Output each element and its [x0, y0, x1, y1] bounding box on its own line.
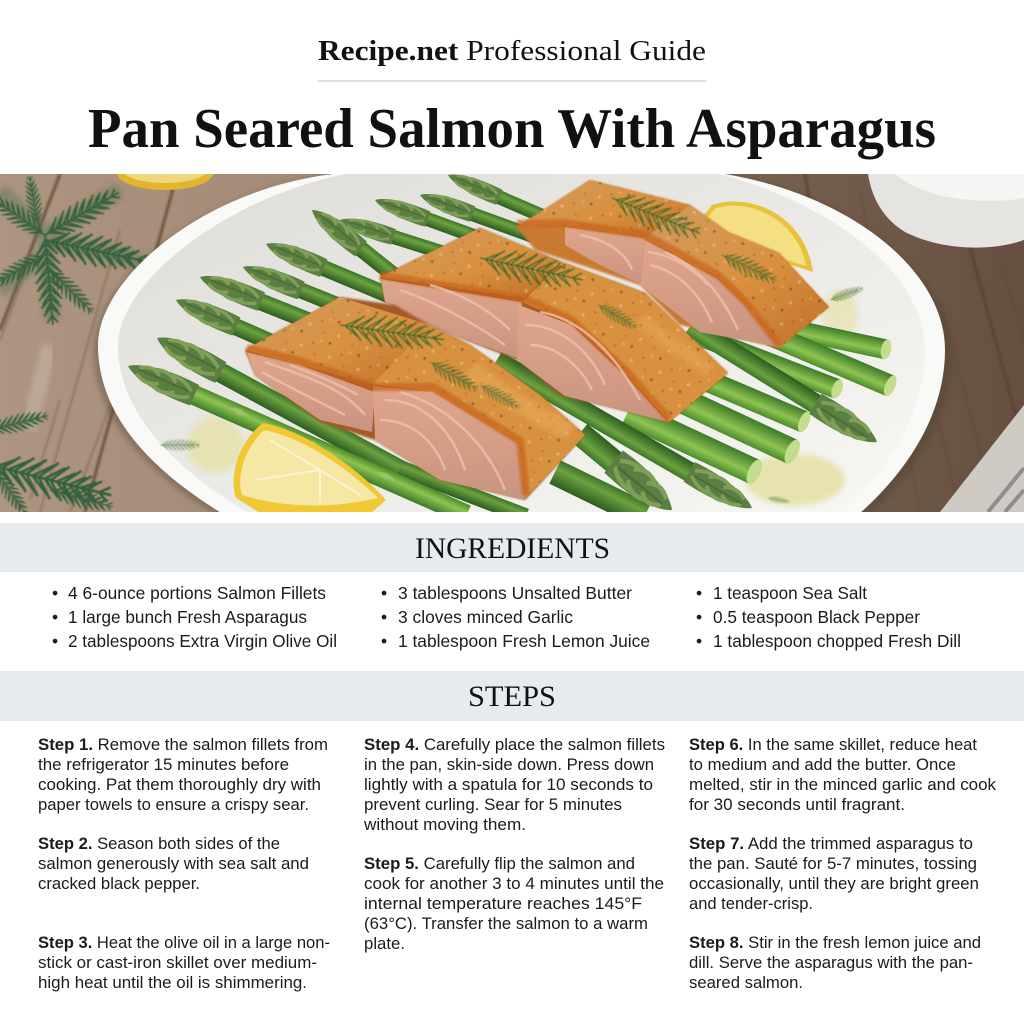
asparagus spears upper left	[172, 167, 557, 366]
steps column 3: dill. Serve the asparagus with the pan-	[689, 954, 973, 972]
steps column 3: and tender-crisp.	[689, 895, 813, 913]
back lemon wedge	[700, 201, 813, 272]
steps column 3: occasionally, until they are bright green	[689, 875, 979, 893]
ingredients list column 2: 3 tablespoons Unsalted Butter	[398, 583, 632, 603]
steps column 1	[38, 736, 330, 992]
steps column 3: melted, stir in the minced garlic and cook	[689, 776, 997, 794]
title: Pan Seared Salmon With Asparagus	[88, 98, 936, 160]
steps column 1: Step 2. Season both sides of the	[38, 835, 280, 853]
steps band	[0, 671, 1024, 721]
steps column 1: the refrigerator 15 minutes before	[38, 756, 289, 774]
dill sprigs on table	[0, 174, 151, 520]
ingredients list column 3: •	[696, 583, 702, 603]
ingredients list column 2: 3 cloves minced Garlic	[398, 607, 573, 627]
ingredients list column 1: •	[52, 631, 58, 651]
header: guide label: Recipe.net Professional Guide	[318, 36, 706, 67]
food photo illustration	[0, 156, 1024, 529]
ingredients list column 2: 1 tablespoon Fresh Lemon Juice	[398, 631, 650, 651]
steps column 2: (63°C). Transfer the salmon to a warm	[364, 915, 648, 933]
ingredients heading: INGREDIENTS	[415, 532, 610, 565]
ingredients list column 2: •	[381, 583, 387, 603]
ingredients list column 3	[696, 583, 961, 651]
steps column 3: Step 8. Stir in the fresh lemon juice and	[689, 934, 981, 952]
ingredients list column 1	[52, 583, 337, 651]
steps column 3: seared salmon.	[689, 974, 803, 992]
wooden table	[0, 174, 1024, 512]
steps column 1: cooking. Pat them thoroughly dry with	[38, 776, 321, 794]
steps column 3: to medium and add the butter. Once	[689, 756, 956, 774]
steps column 1: high heat until the oil is shimmering.	[38, 974, 307, 992]
steps column 2: cook for another 3 to 4 minutes until the	[364, 875, 664, 893]
lemon slice on table	[117, 174, 213, 190]
plate	[94, 174, 952, 529]
ingredients list column 3: •	[696, 631, 702, 651]
ingredients list column 2: •	[381, 607, 387, 627]
steps column 2: prevent curling. Sear for 5 minutes	[364, 796, 622, 814]
salmon fillet middle	[380, 228, 728, 422]
steps column 2: internal temperature reaches 145°F	[364, 895, 642, 913]
steps column 1: paper towels to ensure a crispy sear.	[38, 796, 309, 814]
ingredients list column 1: 4 6-ounce portions Salmon Fillets	[68, 583, 326, 603]
ingredients list column 1: •	[52, 583, 58, 603]
steps column 3: the pan. Sauté for 5-7 minutes, tossing	[689, 855, 977, 873]
steps column 1: stick or cast-iron skillet over medium-	[38, 954, 317, 972]
front lemon slice	[234, 423, 386, 514]
ingredients list column 1: •	[52, 607, 58, 627]
steps column 2: in the pan, skin-side down. Press down	[364, 756, 654, 774]
ingredients list column 3: 1 tablespoon chopped Fresh Dill	[713, 631, 961, 651]
salt bowl	[868, 174, 1024, 248]
butter sauce	[187, 290, 858, 506]
steps column 2: without moving them.	[363, 816, 526, 834]
steps column 1: Step 1. Remove the salmon fillets from	[38, 736, 328, 754]
ingredients list column 1: 1 large bunch Fresh Asparagus	[68, 607, 307, 627]
steps column 3: Step 6. In the same skillet, reduce heat	[689, 736, 977, 754]
ingredients list column 3: 1 teaspoon Sea Salt	[713, 583, 867, 603]
ingredients list column 3: •	[696, 607, 702, 627]
salmon fillet front	[245, 297, 585, 500]
steps column 2: lightly with a spatula for 10 seconds to	[364, 776, 653, 794]
salmon fillet back	[517, 180, 829, 348]
steps column 3: for 30 seconds until fragrant.	[689, 796, 905, 814]
steps column 2: plate.	[364, 935, 405, 953]
dill and herb garnish	[160, 185, 865, 505]
steps column 3: Step 7. Add the trimmed asparagus to	[689, 835, 973, 853]
ingredients list column 2: •	[381, 631, 387, 651]
ingredients list column 3: 0.5 teaspoon Black Pepper	[713, 607, 920, 627]
ingredients band	[0, 523, 1024, 572]
steps heading: STEPS	[468, 680, 556, 713]
ingredients list column 1: 2 tablespoons Extra Virgin Olive Oil	[68, 631, 337, 651]
steps column 1: Step 3. Heat the olive oil in a large non-	[38, 934, 330, 952]
steps column 2: Step 5. Carefully flip the salmon and	[364, 855, 635, 873]
steps column 2	[363, 736, 665, 953]
steps column 1: cracked black pepper.	[38, 875, 200, 893]
napkin and fork	[940, 405, 1024, 512]
steps column 2: Step 4. Carefully place the salmon fillets	[364, 736, 665, 754]
asparagus stalks right	[491, 315, 899, 528]
ingredients list column 2	[381, 583, 650, 651]
asparagus spears front left	[128, 338, 529, 512]
steps column 3	[689, 736, 997, 992]
steps column 1: salmon generously with sea salt and	[38, 855, 309, 873]
